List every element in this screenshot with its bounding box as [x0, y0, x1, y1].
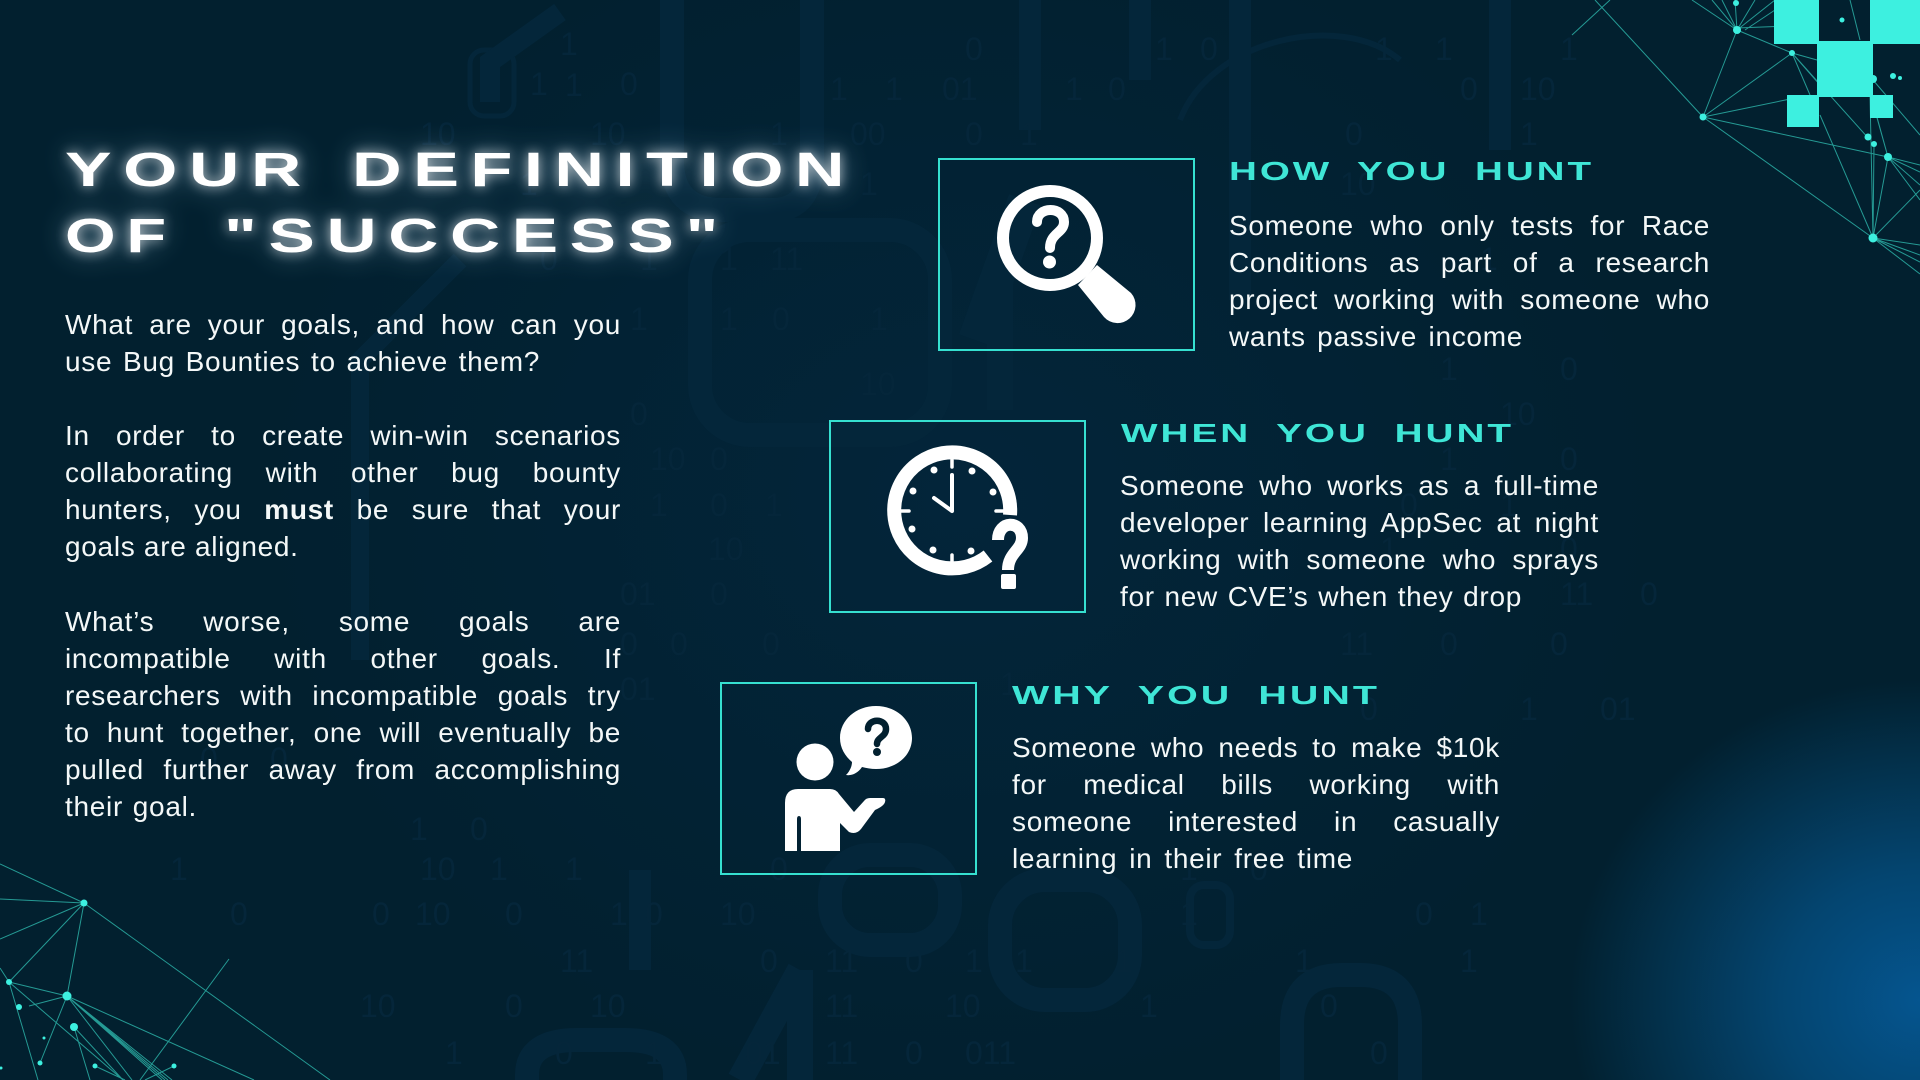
background: faint binary digits: 0: [1250, 851, 1268, 887]
background: faint binary digits: 10: [860, 366, 896, 402]
icon: magnifier with question mark: [938, 158, 1195, 351]
text: when you hunt description: developer learning AppSec at night: [1120, 507, 1599, 538]
background: faint binary digits: 1: [630, 301, 648, 337]
background: faint binary digits: 10: [1340, 166, 1376, 202]
background: faint binary digits: 0: [1560, 531, 1578, 567]
background: faint binary digits: 0: [1560, 441, 1578, 477]
text block: aligned goals: In order to create win-win scenarios: [65, 420, 621, 451]
background: faint binary digits: 1: [1480, 241, 1498, 277]
text: when you hunt description: working with someone who sprays: [1120, 544, 1599, 575]
background: faint binary digits: 0: [1360, 691, 1378, 727]
text: why you hunt description: learning in their free time: [1012, 843, 1353, 874]
background: faint binary digits: 1: [530, 66, 548, 102]
background: faint binary digits: 10: [720, 896, 756, 932]
background: faint binary digits: 1: [1020, 116, 1038, 152]
background: faint binary digits: 0: [630, 396, 648, 432]
background: faint binary digits: 10: [945, 988, 981, 1024]
background: faint binary digits: 0: [470, 811, 488, 847]
title: "SUCCESS": [224, 210, 730, 263]
background: faint binary digits: 1: [1440, 351, 1458, 387]
background: faint binary digits: 01: [1600, 691, 1636, 727]
background: faint binary digits: 0: [1370, 1035, 1388, 1071]
panel: why you hunt: [720, 681, 1500, 875]
background: faint binary digits: 1: [1460, 943, 1478, 979]
text: why you hunt description: Someone who needs to make $10k: [1012, 732, 1500, 763]
background: faint binary digits: 1: [520, 166, 538, 202]
background: faint binary digits: 1: [650, 487, 668, 523]
background: faint binary digits: 0: [670, 626, 688, 662]
background: faint binary digits: 1: [720, 241, 738, 277]
background: faint binary digits: 0: [1345, 116, 1363, 152]
background: faint binary digits: 0: [1460, 71, 1478, 107]
background: faint binary digits: 10: [360, 988, 396, 1024]
background: faint binary digits: 0: [372, 896, 390, 932]
background: faint binary digits: 11: [825, 988, 858, 1024]
background: faint binary digits: 10: [420, 851, 456, 887]
background: faint binary digits: 1: [610, 896, 628, 932]
background: faint binary digits: 10: [415, 896, 451, 932]
background: faint binary digits: 0: [1640, 576, 1658, 612]
text: when you hunt description: Someone who works as a full-time: [1120, 470, 1599, 501]
background: faint binary digits: 0: [965, 116, 983, 152]
background: faint binary digits: 0: [905, 943, 923, 979]
background: faint binary digits: 10: [650, 441, 686, 477]
background: faint binary digits: 0: [1400, 487, 1418, 523]
background: faint binary digits: 1: [765, 487, 783, 523]
background: faint binary digits: 11: [825, 1035, 858, 1071]
background: faint binary digits: 1: [870, 301, 888, 337]
background: faint binary digits: 10: [1500, 396, 1536, 432]
background: faint binary digits: 0: [645, 896, 663, 932]
background: faint binary digits: 10: [590, 116, 626, 152]
background: faint binary digits: 1: [1560, 31, 1578, 67]
text block: aligned goals: hunters, you must be sure that your: [65, 494, 621, 525]
background: faint binary digits: 0: [770, 851, 788, 887]
text block: incompatible goals: incompatible with other goals. If: [65, 642, 621, 674]
background: faint binary digits: 1: [1520, 116, 1538, 152]
background: faint binary digits: 0: [540, 241, 558, 277]
background: faint binary digits: 1: [565, 67, 583, 103]
background: faint binary digits: 1: [1375, 31, 1393, 67]
background: faint binary digits: 10: [1520, 71, 1556, 107]
background: faint binary digits: 1: [720, 301, 738, 337]
background: faint binary digits: 0: [505, 988, 523, 1024]
background: faint binary digits: 11: [1560, 576, 1593, 612]
background: faint binary digits: 10: [590, 988, 626, 1024]
background: faint binary digits: 1: [565, 851, 583, 887]
text: why you hunt description: for medical bills working with: [1012, 769, 1500, 800]
background: faint binary digits: 1: [1115, 943, 1133, 979]
panel: when you hunt: [829, 419, 1599, 613]
background: faint binary digits: 1: [640, 241, 658, 277]
background: faint binary digits: 0: [1200, 31, 1218, 67]
background: faint binary digits: 0: [762, 626, 780, 662]
background: faint binary digits: 01: [620, 576, 656, 612]
background: faint binary digits: 1: [1000, 666, 1018, 702]
background: faint binary digits: 1: [1180, 851, 1198, 887]
background: faint binary digits: 0: [710, 487, 728, 523]
background: faint binary digits: 1: [1065, 71, 1083, 107]
text: when you hunt description: [1120, 470, 1599, 612]
background: faint binary digits: 1: [1140, 988, 1158, 1024]
background: faint binary digits: 1: [410, 811, 428, 847]
text: why you hunt description: [1012, 732, 1500, 874]
panel: how you hunt: [938, 157, 1710, 352]
background: faint binary digits: 1: [860, 166, 878, 202]
background: faint binary digits: 0: [505, 896, 523, 932]
background: faint binary digits: 0: [1320, 988, 1338, 1024]
background: faint binary digits: 0: [1108, 71, 1126, 107]
background: faint binary digits: 11: [825, 943, 858, 979]
background: faint binary digits: 00: [850, 116, 886, 152]
background: faint binary digits: 11: [560, 943, 593, 979]
title: DEFINITION: [352, 144, 856, 197]
background: faint binary digits: 1: [1470, 896, 1488, 932]
background: faint binary digits: 0: [620, 66, 638, 102]
background: faint binary digits: 1: [1500, 487, 1518, 523]
background: faint binary digits: 0: [710, 441, 728, 477]
background: faint binary digits: 1: [770, 116, 788, 152]
background: faint binary digits: 0: [965, 31, 983, 67]
background: faint binary digits: 1: [645, 1035, 663, 1071]
text block: incompatible goals: researchers with incompatible goals try: [65, 680, 621, 710]
background: faint binary digits: 1: [1435, 31, 1453, 67]
title: OF: [65, 210, 177, 263]
background: faint binary digits: 01: [942, 71, 978, 107]
background: faint binary digits: 1: [1180, 896, 1198, 932]
text block: incompatible goals: to hunt together, one will eventually be: [65, 716, 621, 748]
background: faint binary digits: 0: [555, 1035, 573, 1071]
background: faint binary digits: 1: [445, 1035, 463, 1071]
text: how you hunt description: Conditions as part of a research: [1229, 246, 1710, 278]
background: faint binary digits: 10: [420, 116, 456, 152]
text: how you hunt description: Someone who only tests for Race: [1229, 210, 1710, 240]
background: faint binary digits: 0: [230, 896, 248, 932]
text: when you hunt description: for new CVE’s when they drop: [1120, 581, 1522, 612]
background: faint binary digits: 01: [745, 1035, 781, 1071]
background: faint binary digits: 0: [620, 626, 638, 662]
text: how you hunt description: project working with someone who: [1229, 284, 1710, 314]
background: faint binary digits: 1: [560, 26, 578, 62]
icon: person with question speech bubble: [720, 682, 977, 875]
background: faint binary digits: 1: [1155, 31, 1173, 67]
background: faint binary digits: 1: [1015, 943, 1033, 979]
background: faint binary digits: 0: [1560, 351, 1578, 387]
background: faint binary digits: 0: [772, 301, 790, 337]
background: faint binary digits: 0: [710, 576, 728, 612]
text block: aligned goals: goals are aligned.: [65, 531, 299, 562]
background: faint binary digits: 0: [1550, 626, 1568, 662]
background: faint binary digits: 1: [490, 851, 508, 887]
background: faint binary digits: 1: [885, 71, 903, 107]
text block: incompatible goals: their goal.: [65, 790, 197, 822]
background: faint binary digits: 11: [1340, 626, 1373, 662]
background: faint binary digits: 1: [1380, 531, 1398, 567]
text block: incompatible goals: [65, 606, 621, 822]
background: faint binary digits: 0: [270, 741, 288, 777]
title: YOUR: [65, 144, 313, 197]
text block: intro question: What are your goals, and how can you: [65, 309, 621, 340]
text block: incompatible goals: What’s worse, some goals are: [65, 606, 621, 636]
background: faint binary digits: 0: [1440, 626, 1458, 662]
background: faint binary digits: 10: [708, 531, 744, 567]
text: how you hunt description: wants passive income: [1229, 320, 1523, 352]
background: faint binary digits: 1: [1440, 441, 1458, 477]
background: faint binary digits: 0: [905, 1035, 923, 1071]
background: faint binary digits: 1: [965, 943, 983, 979]
text block: intro question: [65, 309, 621, 377]
text: how you hunt description: [1229, 210, 1710, 352]
background: faint binary digits: 0: [760, 943, 778, 979]
title: [55, 138, 856, 267]
background: faint binary digits: 1: [170, 851, 188, 887]
text block: incompatible goals: pulled further away from accomplishing: [65, 754, 621, 784]
background: faint binary digits: 1: [830, 71, 848, 107]
text block: intro question: use Bug Bounties to achieve them?: [65, 346, 540, 377]
text block: aligned goals: collaborating with other bug bounty: [65, 457, 621, 488]
background: faint binary digits: 1: [1295, 943, 1313, 979]
text: why you hunt description: someone interested in casually: [1012, 806, 1500, 837]
background: faint binary digits: 011: [965, 1035, 1016, 1071]
background: faint binary digits: 0: [200, 741, 218, 777]
text block: aligned goals: [65, 420, 621, 562]
background: faint binary digits: 01: [620, 671, 656, 707]
icon: clock with question mark: [829, 420, 1086, 613]
background: faint binary digits: 1: [1520, 691, 1538, 727]
background: faint binary digits: 11: [770, 241, 803, 277]
background: faint binary digits: 0: [1415, 896, 1433, 932]
